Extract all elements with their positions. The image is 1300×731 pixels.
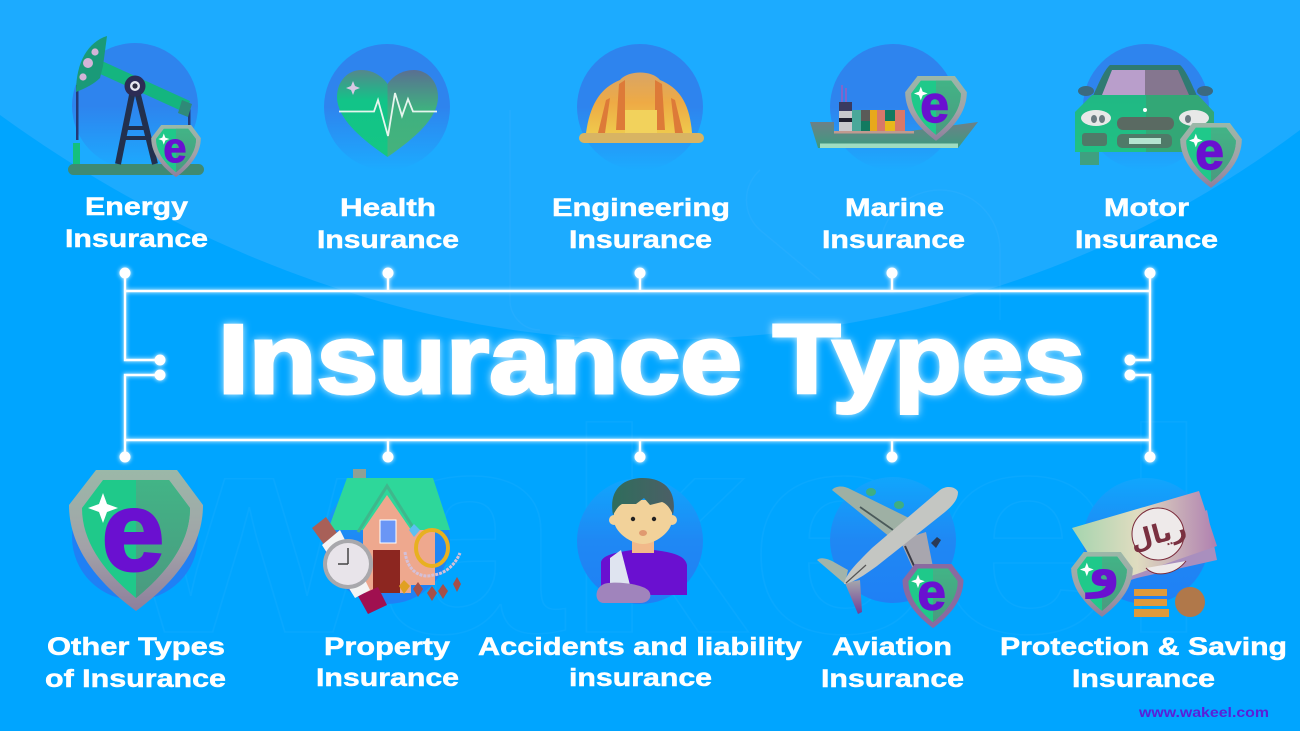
icon: shield badge	[1071, 538, 1133, 617]
label: other types: of Insurance	[45, 665, 226, 693]
icon: shield badge: و	[1084, 538, 1120, 599]
label: aviation	[821, 633, 964, 693]
label: energy	[65, 193, 208, 253]
circuit frame	[120, 268, 1156, 462]
panel: motor insurance	[1075, 44, 1242, 254]
label: marine: Insurance	[822, 226, 965, 254]
label: property	[316, 633, 459, 692]
label: engineering	[552, 194, 730, 254]
icon: heart	[324, 44, 450, 170]
label: property: Insurance	[316, 664, 459, 692]
label: aviation: Insurance	[821, 665, 964, 693]
panel: property insurance	[312, 469, 461, 692]
label: health	[317, 194, 459, 254]
icon: airplane	[817, 477, 958, 614]
icon: injured person	[577, 478, 703, 604]
icon: large shield	[69, 469, 203, 611]
label: motor: Motor	[1104, 194, 1189, 222]
watermark	[115, 110, 1210, 694]
panel: marine insurance	[810, 44, 978, 254]
icon: cargo ship	[810, 44, 978, 170]
icon: shield badge: e	[917, 564, 946, 620]
icon: shield badge	[905, 75, 967, 141]
panel: health insurance	[317, 44, 459, 254]
label: accidents: insurance	[569, 664, 712, 692]
label: engineering: Engineering	[552, 194, 730, 222]
icon: house, watch and jewellery	[312, 469, 461, 614]
icon: hard hat	[577, 44, 704, 170]
label: other types: Other Types	[47, 633, 225, 661]
label: other types	[45, 633, 226, 693]
label: accidents	[478, 633, 802, 692]
icon: car	[1075, 44, 1214, 170]
label: property: Property	[324, 633, 450, 661]
watermark: wakeel	[115, 370, 1210, 694]
panel: engineering insurance	[552, 44, 730, 254]
icon: large shield: e	[102, 469, 164, 594]
label: aviation: Aviation	[832, 633, 952, 661]
icon: shield badge	[1180, 122, 1242, 188]
icon: shield badge: e	[920, 75, 949, 133]
label: protection and saving	[1000, 633, 1287, 693]
label: health: Insurance	[317, 226, 459, 254]
icon: shield badge: e	[1195, 122, 1224, 180]
label: engineering: Insurance	[569, 226, 712, 254]
label: motor: Insurance	[1075, 226, 1218, 254]
panel: aviation insurance	[817, 477, 964, 693]
panel: other types of insurance	[45, 469, 226, 693]
panel: protection and saving insurance	[1000, 478, 1287, 693]
title: Insurance Types	[218, 304, 1085, 414]
icon: shield badge	[903, 564, 963, 628]
website url: www.wakeel.com	[1138, 704, 1269, 720]
label: health: Health	[340, 194, 436, 222]
label: marine	[822, 194, 965, 254]
label: protection and saving: Insurance	[1072, 665, 1215, 693]
label: marine: Marine	[845, 194, 944, 222]
icon: shield badge: e	[163, 124, 186, 171]
panel: energy insurance	[65, 36, 208, 253]
icon: oil pump	[68, 36, 204, 175]
label: energy: Insurance	[65, 225, 208, 253]
icon: shield badge	[151, 124, 201, 177]
label: accidents: Accidents and liability	[478, 633, 802, 661]
icon: banknotes	[1072, 478, 1217, 617]
icon: banknotes: ريال	[1127, 513, 1190, 557]
label: energy: Energy	[85, 193, 188, 221]
label: motor	[1075, 194, 1218, 254]
label: protection and saving: Protection & Saving	[1000, 633, 1287, 661]
panel: accidents and liability insurance	[478, 478, 802, 692]
